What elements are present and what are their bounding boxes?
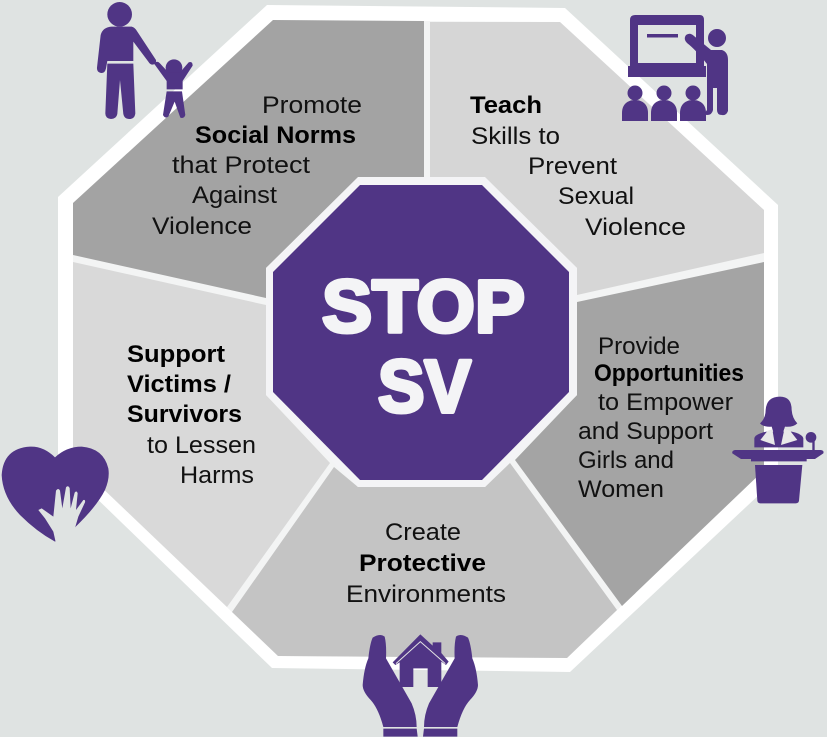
text: support victims	[127, 341, 256, 489]
icon: heart with hand	[2, 447, 109, 542]
text: protective environments	[346, 519, 506, 608]
text: promote social norms	[152, 92, 362, 240]
left hand	[363, 635, 417, 727]
panel: provide opportunities	[515, 262, 764, 606]
text: teach skills: Violence	[585, 214, 686, 241]
text: protective environments: Create	[385, 519, 461, 546]
text: teach skills: Prevent	[528, 153, 617, 180]
text: protective environments: Protective	[359, 550, 486, 577]
text: promote social norms: Against	[192, 182, 277, 209]
title: STOP SV	[322, 265, 525, 428]
text: provide opportunities: Girls and	[578, 447, 674, 474]
text: provide opportunities	[578, 333, 744, 503]
panel: teach skills	[430, 22, 764, 295]
text: support victims: Survivors	[127, 401, 242, 428]
text: support victims: to Lessen	[147, 432, 256, 459]
center stop sign	[266, 177, 577, 487]
icon: parent and child	[97, 2, 193, 119]
title: STOP SV: STOP	[322, 265, 525, 348]
panel: protective environments	[232, 463, 617, 658]
text: teach skills: Sexual	[558, 183, 634, 210]
title: STOP SV: SV	[378, 345, 471, 428]
panel: social norms	[73, 20, 424, 298]
panel: support victims	[73, 262, 330, 607]
text: promote social norms: Violence	[152, 213, 252, 240]
text: provide opportunities: and Support	[578, 418, 713, 445]
text: teach skills: Teach	[470, 92, 542, 119]
text: provide opportunities: Provide	[598, 333, 680, 360]
icon: speaker at podium	[732, 397, 824, 503]
text: protective environments: Environments	[346, 581, 506, 608]
icon: teacher and class	[622, 15, 728, 121]
text: teach skills	[470, 92, 686, 241]
icon: hands and house	[363, 634, 478, 737]
text: provide opportunities: Opportunities	[594, 360, 744, 387]
text: support victims: Victims /	[127, 371, 231, 398]
text: provide opportunities: Women	[578, 476, 664, 503]
text: support victims: Harms	[180, 462, 254, 489]
text: promote social norms: Promote	[262, 92, 362, 119]
text: teach skills: Skills to	[471, 123, 560, 150]
house	[393, 634, 449, 687]
text: provide opportunities: to Empower	[598, 389, 733, 416]
text: support victims: Support	[127, 341, 225, 368]
white octagon frame	[58, 5, 778, 672]
text: promote social norms: Social Norms	[195, 122, 356, 149]
right hand	[424, 635, 478, 727]
text: promote social norms: that Protect	[172, 152, 310, 179]
